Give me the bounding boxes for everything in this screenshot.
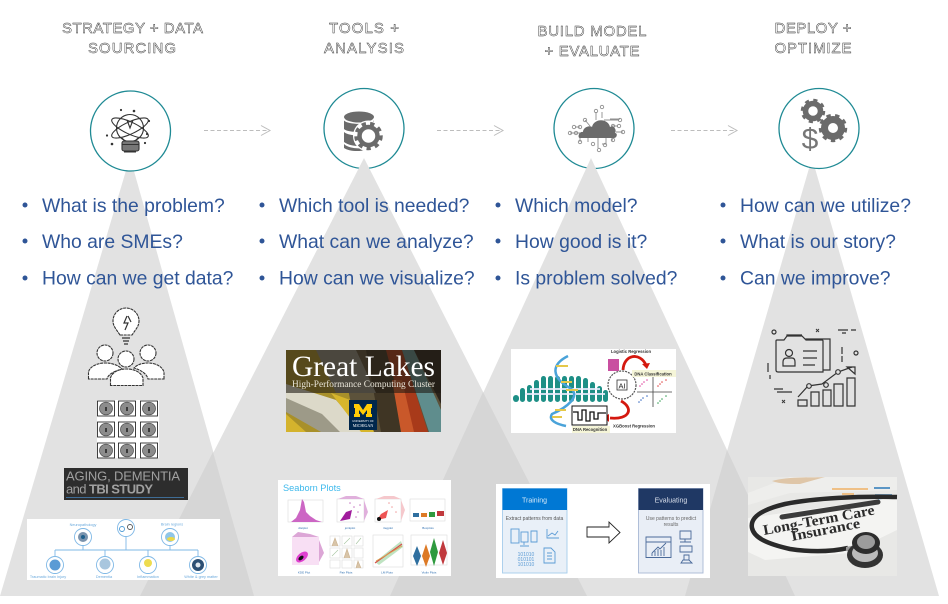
chart captions: LM Plots	[381, 570, 393, 574]
heading: strategy and data sourcing: STRATEGY + DATA	[62, 20, 203, 37]
icon: gears and dollar sign	[802, 100, 846, 156]
arrow: step 1 to step 2	[204, 126, 270, 136]
icon: database with gear	[344, 112, 384, 152]
diagram: study topics tree	[27, 519, 220, 580]
diagram: study topics tree: Dementia	[96, 575, 113, 579]
red arrows	[610, 356, 646, 418]
image: DNA machine learning figure: AI	[618, 382, 626, 390]
question list: strategy	[22, 195, 234, 290]
chart captions: jointplot	[344, 526, 355, 530]
icon: profile folder and growth chart	[768, 329, 858, 406]
card: training: Extract patterns from data	[506, 516, 563, 522]
image: Great Lakes computing cluster banner: UNIVERSITY OF	[352, 419, 374, 423]
image: Great Lakes computing cluster banner: High-Performance Computing Cluster	[292, 379, 436, 390]
diagram: study topics tree: Inflammation	[137, 575, 159, 579]
brain with AI label	[608, 371, 636, 399]
heading: build model and evaluate: + EVALUATE	[544, 43, 640, 60]
icon: team under a light bulb	[88, 308, 164, 386]
icon: light bulb with orbits	[106, 109, 151, 152]
image: seaborn plots gallery	[278, 480, 451, 576]
heading: strategy and data sourcing: SOURCING	[88, 40, 176, 57]
heading: deploy and optimize: OPTIMIZE	[774, 40, 852, 57]
card: training	[502, 488, 567, 573]
heading: strategy and data sourcing	[62, 20, 203, 57]
icon circle 3	[554, 88, 634, 168]
heading: tools and analysis: ANALYSIS	[324, 40, 404, 57]
heading: build model and evaluate: BUILD MODEL	[538, 23, 646, 40]
card: training: Training	[522, 498, 547, 504]
chart: regression plot	[373, 535, 403, 567]
chart: density scatter	[375, 496, 405, 522]
question list: model: How good is it?	[515, 231, 647, 253]
image: DNA machine learning figure: Logistic Regression	[611, 349, 651, 354]
diagram: study topics tree: Brain regions	[161, 522, 183, 526]
background triangles: second and third, with overlaps	[140, 158, 795, 596]
heading: tools and analysis: TOOLS +	[329, 20, 399, 37]
scatter quadrants	[637, 376, 672, 407]
image: Great Lakes computing cluster banner: Great Lakes	[292, 350, 435, 383]
question list: deploy: How can we utilize?	[740, 195, 911, 217]
labels	[632, 370, 676, 377]
icon: cloud with circuit lines	[568, 105, 625, 152]
question list: model: Which model?	[515, 195, 638, 217]
card: evaluating: results	[664, 522, 679, 528]
card: training: 010101	[518, 557, 535, 563]
question list: tools: What can we analyze?	[279, 231, 474, 253]
question list: deploy	[720, 195, 911, 290]
chart captions	[298, 526, 437, 574]
heading: deploy and optimize: DEPLOY +	[774, 20, 852, 37]
question list: model: Is problem solved?	[515, 268, 678, 290]
question list: tools: Which tool is needed?	[279, 195, 470, 217]
diagram: study topics tree: Traumatic brain injury	[30, 575, 66, 579]
image: DNA machine learning figure: XGBoost Regression	[613, 424, 655, 428]
question list: strategy: What is the problem?	[42, 195, 225, 217]
magenta cube	[608, 359, 619, 371]
question list: strategy: How can we get data?	[42, 268, 234, 290]
image: Great Lakes computing cluster banner: MICHIGAN	[353, 423, 373, 428]
question list: deploy: Can we improve?	[740, 268, 891, 290]
heading: deploy and optimize	[774, 20, 852, 57]
diagram: training and evaluating	[496, 484, 710, 578]
chart captions: Boxplots	[422, 526, 434, 530]
image: DNA machine learning figure: DNA Classification	[634, 372, 672, 376]
icon circle 1	[90, 91, 170, 171]
DNA lattice	[513, 376, 608, 402]
question list: tools	[260, 195, 475, 290]
chart captions: distplot	[298, 526, 308, 530]
signal box	[572, 406, 607, 425]
heading: tools and analysis	[324, 20, 404, 57]
card: training: 101010	[518, 562, 535, 568]
background triangles behind icons: first and fourth	[0, 157, 939, 596]
question list: tools: How can we visualize?	[279, 268, 475, 290]
chart: pair plots	[330, 536, 363, 568]
question list: model	[496, 195, 678, 290]
arrow: training to evaluating	[587, 522, 620, 543]
chart: KDE plot	[292, 532, 324, 565]
chart captions: Pair Plots	[340, 570, 353, 574]
image: long-term care insurance with stethoscope	[748, 477, 897, 576]
diagram: study topics tree: White & grey matter	[184, 575, 219, 579]
chart: box plots	[410, 499, 445, 521]
banner: aging, dementia and TBI study	[64, 468, 188, 500]
heading: build model and evaluate	[538, 23, 646, 60]
icon: gears and dollar sign: $	[802, 123, 819, 156]
chart captions: KDE Plot	[298, 570, 310, 574]
question list: deploy: What is our story?	[740, 231, 896, 253]
image: DNA machine learning figure: DNA Recognition	[573, 427, 608, 432]
card: evaluating: Evaluating	[655, 498, 687, 504]
image: Great Lakes computing cluster banner	[286, 350, 441, 432]
arrow: step 2 to step 3	[437, 126, 503, 136]
chart: joint plot	[337, 496, 368, 522]
icon circle 4	[779, 88, 859, 168]
arrow: step 3 to step 4	[671, 126, 737, 136]
image: long-term care insurance with stethoscope: Long-Term Care	[762, 502, 876, 539]
chart: histogram	[288, 499, 323, 522]
card: training: 101010	[518, 552, 535, 558]
banner: aging, dementia and TBI study: and TBI STUDY	[66, 482, 153, 496]
chart captions: Violin Plots	[422, 570, 437, 574]
icon circle 2	[324, 88, 404, 168]
diagram: study topics tree: Neuropathology	[70, 523, 97, 527]
chart captions: rlegplot	[383, 526, 393, 530]
image: long-term care insurance with stethoscope: Insurance	[790, 516, 862, 545]
chart: violin plots	[411, 535, 447, 567]
banner: aging, dementia and TBI study: AGING, DEMENTIA	[66, 468, 180, 484]
image: DNA machine learning figure	[511, 349, 676, 433]
question list: strategy: Who are SMEs?	[42, 231, 183, 253]
DNA helix	[551, 356, 574, 426]
card: evaluating: Use patterns to predict	[646, 516, 697, 522]
image: brain scan grid	[97, 400, 159, 458]
card: evaluating	[638, 488, 703, 573]
image: seaborn plots gallery: Seaborn Plots	[283, 483, 341, 493]
